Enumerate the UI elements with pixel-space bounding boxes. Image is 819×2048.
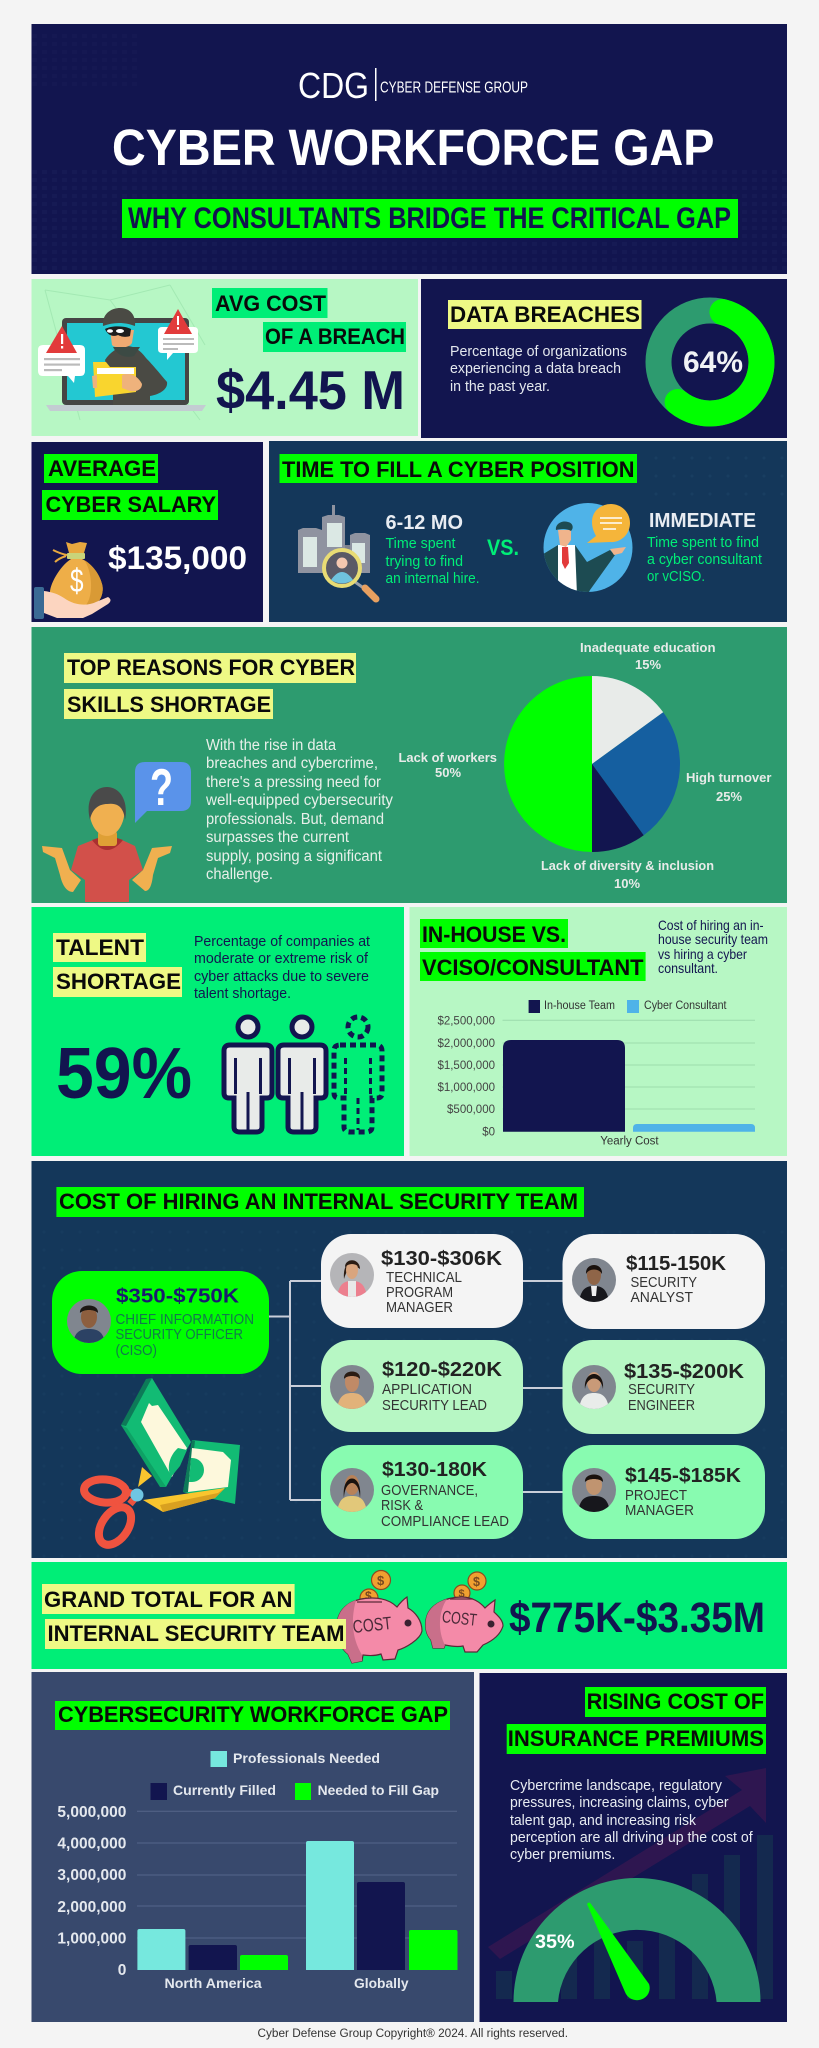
description: cyber attacks due to severe	[194, 968, 369, 985]
card: application security lead: SECURITY LEAD	[382, 1397, 487, 1414]
bar chart: workforce gap: Globally	[354, 1975, 409, 1991]
heading: rising cost: RISING COST OF	[587, 1689, 764, 1714]
card: security analyst	[562, 1234, 765, 1329]
bar chart: workforce gap: Currently Filled	[173, 1782, 276, 1798]
card: security engineer	[562, 1340, 765, 1434]
heading: time to fill: TIME TO FILL A CYBER POSITION	[282, 457, 634, 482]
description: Cost of hiring an in-	[658, 917, 764, 933]
card: security engineer: SECURITY	[628, 1381, 695, 1398]
description: talent shortage.	[194, 985, 291, 1002]
icon: three people	[224, 1017, 382, 1132]
card: CISO: SECURITY OFFICER	[116, 1326, 243, 1343]
gauge: 35%	[514, 1878, 760, 2002]
bar chart: yearly cost	[437, 1000, 755, 1148]
heading: talent shortage	[53, 933, 182, 997]
footer: Cyber Defense Group Copyright® 2024. All rights reserved.	[258, 2028, 568, 2040]
icon: confused person: ?	[150, 759, 173, 817]
card: application security lead	[321, 1340, 523, 1432]
heading: grand total: INTERNAL SECURITY TEAM	[48, 1621, 344, 1646]
description	[510, 1777, 753, 1863]
card: governance risk and compliance lead: GOVERNANCE,	[381, 1482, 478, 1499]
logo: CYBER DEFENSE GROUP	[380, 80, 528, 96]
card: governance risk and compliance lead	[321, 1445, 523, 1539]
heading: talent shortage: SHORTAGE	[56, 969, 181, 994]
text: immediate: or vCISO.	[647, 568, 705, 585]
label: versus: VS.	[487, 535, 519, 560]
icon: piggy banks	[337, 1570, 503, 1663]
card: security engineer: $135-$200K	[624, 1360, 744, 1383]
panel: rising cost of insurance premiums	[480, 1673, 787, 2022]
icon: scissors cutting money	[83, 1378, 240, 1551]
panel: average cost of a breach	[32, 279, 418, 436]
subtitle: WHY CONSULTANTS BRIDGE THE CRITICAL GAP	[128, 202, 731, 235]
card: project manager	[562, 1445, 765, 1539]
panel: header	[32, 24, 787, 274]
card: project manager: PROJECT	[625, 1487, 687, 1504]
description: breaches and cybercrime,	[206, 755, 378, 772]
pie labels: 10%	[614, 876, 640, 891]
heading: in-house vs vciso	[420, 919, 646, 981]
panel: time to fill a cyber position	[269, 441, 787, 622]
text: 6-12 months: trying to find	[386, 553, 463, 570]
card: CISO: $350-$750K	[116, 1285, 239, 1308]
bar chart: workforce gap: 1,000,000	[57, 1930, 126, 1948]
bar chart: workforce gap	[57, 1750, 457, 1991]
description: talent gap, and increasing risk	[510, 1812, 696, 1829]
description: professionals. But, demand	[206, 811, 384, 828]
bar chart: workforce gap: 4,000,000	[57, 1836, 126, 1852]
pie labels: 50%	[435, 765, 461, 780]
card: governance risk and compliance lead: $130-180K	[382, 1458, 487, 1481]
description: experiencing a data breach	[450, 360, 621, 377]
pie labels: Lack of workers	[398, 750, 497, 765]
bar chart: yearly cost: $2,500,000	[437, 1016, 495, 1028]
icon: piggy banks: $	[365, 1589, 372, 1603]
card: CISO: (CISO)	[116, 1342, 157, 1359]
donut chart: 64%	[658, 310, 762, 414]
panel: data breaches	[421, 279, 787, 438]
icon: piggy banks: COST	[441, 1607, 478, 1630]
card: application security lead: APPLICATION	[382, 1381, 472, 1398]
heading: rising cost: INSURANCE PREMIUMS	[508, 1726, 764, 1751]
heading: grand total	[42, 1584, 346, 1649]
logo: CDG	[298, 65, 369, 106]
bar chart: yearly cost: $2,000,000	[437, 1038, 495, 1050]
bar chart: workforce gap: Professionals Needed	[233, 1750, 380, 1766]
description: supply, posing a significant	[206, 848, 383, 865]
heading: cost of hiring: COST OF HIRING AN INTERNAL SECURITY TEAM	[59, 1189, 578, 1214]
icon: piggy banks: $	[377, 1573, 385, 1588]
bar chart: workforce gap: 5,000,000	[57, 1804, 126, 1821]
title: CYBER WORKFORCE GAP	[112, 119, 714, 176]
card: security analyst: SECURITY	[630, 1274, 697, 1291]
bar chart: yearly cost: $1,500,000	[437, 1060, 495, 1072]
bar chart: workforce gap: 3,000,000	[57, 1867, 126, 1884]
card: security analyst: $115-150K	[626, 1252, 726, 1275]
icon: hacker at laptop	[38, 308, 206, 411]
bar chart: yearly cost: $0	[482, 1126, 495, 1138]
panel: cost of hiring an internal security team	[32, 1161, 787, 1558]
pie labels	[398, 640, 772, 891]
panel: grand total	[32, 1562, 787, 1669]
card: technical program manager: MANAGER	[386, 1299, 453, 1316]
description	[450, 343, 627, 395]
bar chart: yearly cost: $1,000,000	[437, 1082, 495, 1094]
text: 6-12 months: an internal hire.	[386, 570, 480, 587]
description: there's a pressing need for	[206, 774, 381, 791]
bar chart: workforce gap: North America	[164, 1975, 262, 1991]
text: 6-12 months	[386, 512, 480, 587]
heading: rising cost	[507, 1687, 766, 1754]
heading: grand total: GRAND TOTAL FOR AN	[44, 1587, 292, 1612]
description: Cybercrime landscape, regulatory	[510, 1777, 722, 1794]
card: project manager: $145-$185K	[625, 1464, 741, 1487]
icon: money bag in hand	[34, 542, 110, 619]
bar chart: workforce gap: 0	[118, 1962, 126, 1979]
heading: in-house vs vciso: VCISO/CONSULTANT	[422, 955, 644, 980]
icon: confused person	[42, 759, 191, 902]
pie chart: reasons	[504, 676, 680, 852]
card: security analyst: ANALYST	[630, 1289, 693, 1306]
description: house security team	[658, 931, 768, 947]
card: technical program manager	[321, 1234, 523, 1328]
heading: talent shortage: TALENT	[56, 935, 144, 960]
heading: average cyber salary: CYBER SALARY	[46, 492, 216, 517]
bar chart: yearly cost: Yearly Cost	[600, 1136, 659, 1148]
card: security engineer: ENGINEER	[628, 1397, 695, 1414]
pie labels: 25%	[716, 789, 742, 804]
description: Percentage of organizations	[450, 343, 627, 360]
icon: consultant with speech bubble	[544, 503, 632, 592]
card: governance risk and compliance lead: RISK &	[381, 1497, 423, 1514]
card: CISO	[52, 1271, 269, 1374]
bar chart: yearly cost: $500,000	[447, 1104, 495, 1116]
icon: piggy banks: $	[458, 1588, 465, 1600]
card: technical program manager: PROGRAM	[386, 1284, 453, 1301]
description: With the rise in data	[206, 737, 336, 754]
description: well-equipped cybersecurity	[205, 792, 393, 809]
description	[205, 737, 393, 883]
description: vs hiring a cyber	[658, 946, 747, 962]
card: application security lead: $120-$220K	[382, 1358, 502, 1381]
donut chart: 64%: 64%	[683, 346, 743, 379]
bar chart: workforce gap: Needed to Fill Gap	[318, 1782, 439, 1798]
description: in the past year.	[450, 378, 550, 395]
heading: top reasons: SKILLS SHORTAGE	[67, 692, 271, 717]
pie labels: High turnover	[686, 770, 772, 785]
bar chart: yearly cost: In-house Team	[544, 1000, 615, 1012]
description	[194, 933, 371, 1002]
panel: average cyber salary	[32, 442, 263, 622]
heading: in-house vs vciso: IN-HOUSE VS.	[422, 922, 566, 947]
description	[658, 917, 768, 976]
icon: piggy banks: $	[473, 1575, 480, 1589]
card: project manager: MANAGER	[625, 1502, 694, 1519]
text: 6-12 months: Time spent	[386, 535, 456, 552]
card: technical program manager: TECHNICAL	[386, 1269, 462, 1286]
heading: workforce gap: CYBERSECURITY WORKFORCE GAP	[58, 1702, 448, 1727]
heading: avg cost of a breach: OF A BREACH	[265, 324, 405, 349]
bar chart: workforce gap: 2,000,000	[57, 1899, 126, 1916]
card: governance risk and compliance lead: COMPLIANCE LEAD	[381, 1513, 509, 1530]
description: surpasses the current	[206, 829, 350, 846]
panel: in-house vs vciso	[410, 907, 787, 1156]
pie labels: 15%	[635, 657, 661, 672]
icon: piggy banks: COST	[352, 1613, 393, 1637]
description: consultant.	[658, 960, 718, 976]
text: 6-12 months: 6-12 MO	[386, 512, 463, 534]
panel: cybersecurity workforce gap	[32, 1672, 474, 2022]
heading: avg cost of a breach: AVG COST	[215, 291, 326, 316]
description: Percentage of companies at	[194, 933, 371, 950]
pie labels: Lack of diversity & inclusion	[541, 858, 714, 873]
panel: talent shortage	[32, 907, 404, 1156]
description: pressures, increasing claims, cyber	[510, 1794, 729, 1811]
text: immediate: IMMEDIATE	[649, 510, 756, 532]
text: immediate	[647, 510, 763, 585]
bar chart: yearly cost: Cyber Consultant	[644, 1000, 727, 1012]
stat: grand total: $775K-$3.35M	[509, 1594, 765, 1642]
icon: money bag in hand: $	[70, 562, 84, 599]
stat: breach cost: $4.45 M	[216, 359, 405, 421]
heading: avg cost of a breach	[212, 288, 406, 352]
heading: top reasons: TOP REASONS FOR CYBER	[67, 655, 355, 680]
panel: top reasons for cyber skills shortage	[32, 627, 787, 903]
stat: salary: $135,000	[108, 540, 247, 576]
pie labels: Inadequate education	[580, 640, 716, 655]
heading: average cyber salary	[42, 454, 218, 520]
card: CISO: CHIEF INFORMATION	[116, 1311, 254, 1328]
text: immediate: Time spent to find	[647, 534, 759, 551]
description: cyber premiums.	[510, 1846, 615, 1863]
card: technical program manager: $130-$306K	[381, 1247, 502, 1270]
heading: average cyber salary: AVERAGE	[48, 456, 156, 481]
icon: building and magnifier	[298, 505, 376, 599]
heading: data breaches: DATA BREACHES	[450, 302, 640, 327]
stat: 59%: 59%	[56, 1034, 192, 1114]
heading: top reasons	[64, 653, 356, 719]
text: immediate: a cyber consultant	[647, 551, 763, 568]
description: challenge.	[206, 866, 273, 883]
description: moderate or extreme risk of	[194, 950, 369, 967]
logo	[298, 65, 528, 106]
description: perception are all driving up the cost of	[510, 1829, 753, 1846]
gauge: 35%: 35%	[535, 1932, 575, 1953]
